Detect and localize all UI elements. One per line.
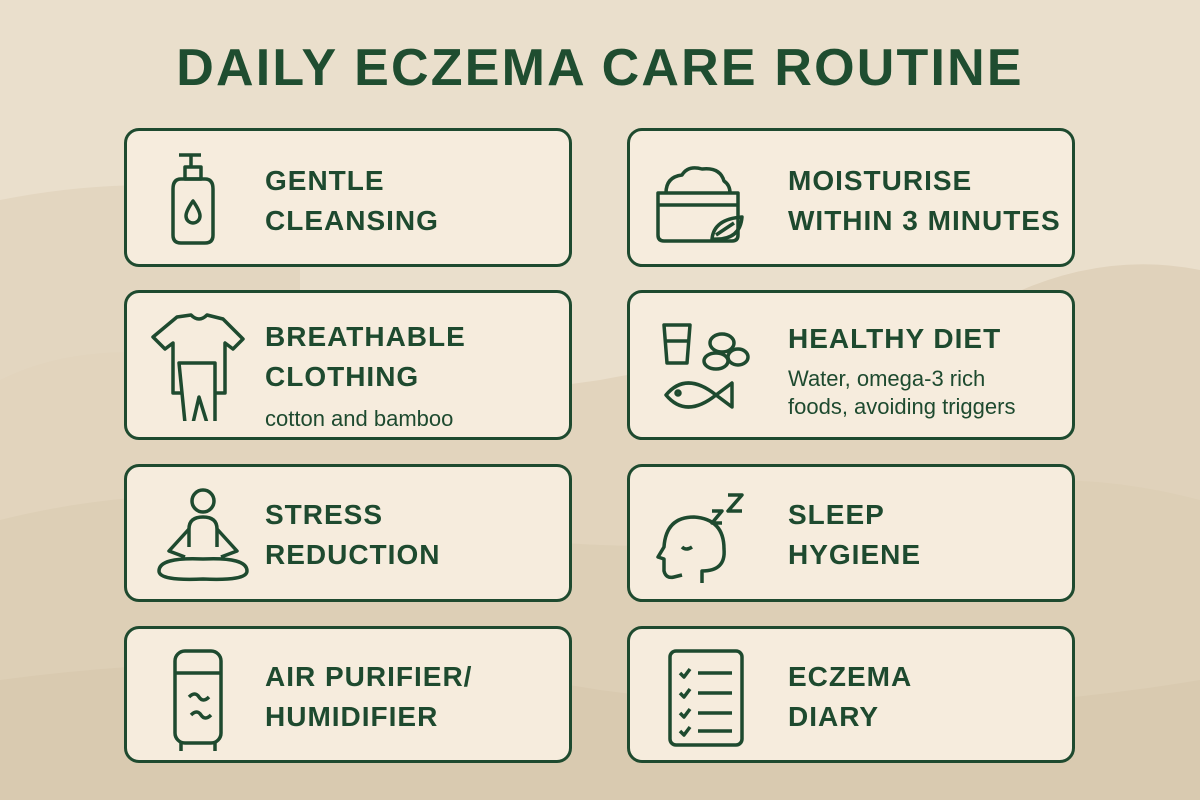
icon: soap bottle bbox=[171, 153, 215, 245]
icon: clothes bbox=[151, 313, 245, 421]
title: DAILY ECZEMA CARE ROUTINE bbox=[176, 39, 1024, 97]
panel: stress reduction: REDUCTION bbox=[265, 539, 440, 570]
panel: sleep hygiene bbox=[627, 464, 1075, 602]
panel: stress reduction bbox=[124, 464, 572, 602]
panel: moisturise bbox=[627, 128, 1075, 267]
panel: breathable clothing: CLOTHING bbox=[265, 361, 419, 392]
icon: sleeping head bbox=[656, 493, 744, 583]
icon: cream jar bbox=[656, 166, 744, 243]
panel: eczema diary: DIARY bbox=[788, 701, 879, 732]
panel: gentle cleansing: CLEANSING bbox=[265, 205, 439, 236]
panel: gentle cleansing bbox=[124, 128, 572, 267]
panel: healthy diet: HEALTHY DIET bbox=[788, 323, 1001, 354]
panel: sleep hygiene: SLEEP bbox=[788, 499, 885, 530]
icon: meditation bbox=[157, 488, 249, 582]
panel: eczema diary bbox=[627, 626, 1075, 763]
panel: stress reduction: STRESS bbox=[265, 499, 383, 530]
panel: eczema diary: ECZEMA bbox=[788, 661, 912, 692]
panel: air purifier: HUMIDIFIER bbox=[265, 701, 438, 732]
panel: breathable clothing bbox=[124, 290, 572, 440]
panel: healthy diet: Water, omega-3 rich bbox=[788, 366, 985, 391]
panel: breathable clothing: BREATHABLE bbox=[265, 321, 466, 352]
panel: air purifier: AIR PURIFIER/ bbox=[265, 661, 472, 692]
icon: food bbox=[662, 323, 750, 409]
panel: healthy diet: foods, avoiding triggers bbox=[788, 394, 1015, 419]
panel: healthy diet bbox=[627, 290, 1075, 440]
panel: air purifier bbox=[124, 626, 572, 763]
panel: breathable clothing: cotton and bamboo bbox=[265, 406, 453, 431]
panel: moisturise: MOISTURISE bbox=[788, 165, 972, 196]
panel: moisturise: WITHIN 3 MINUTES bbox=[788, 205, 1061, 236]
icon: checklist bbox=[668, 649, 744, 747]
panel: sleep hygiene: HYGIENE bbox=[788, 539, 921, 570]
icon: air purifier bbox=[173, 649, 223, 751]
panel: gentle cleansing: GENTLE bbox=[265, 165, 385, 196]
